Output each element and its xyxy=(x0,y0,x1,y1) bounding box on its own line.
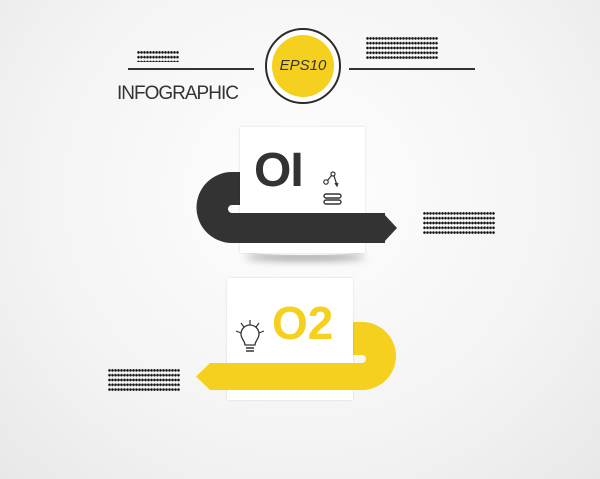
badge: EPS10: EPS10 xyxy=(280,57,326,74)
header xyxy=(117,28,475,104)
dotted text 01 xyxy=(423,211,495,235)
header right dotted text xyxy=(366,36,438,60)
icon: share and lines xyxy=(323,171,342,205)
yellow band loop xyxy=(353,322,396,390)
card 01 xyxy=(240,127,365,253)
dark arrow band xyxy=(240,213,397,243)
badge: EPS10 xyxy=(265,28,341,104)
number 01: OI xyxy=(254,144,303,197)
step 01 xyxy=(196,126,495,266)
yellow arrow band xyxy=(196,363,365,390)
step 02 xyxy=(108,277,396,401)
dotted text 02 xyxy=(108,368,180,392)
dark band top loop xyxy=(196,172,385,243)
number 02: O2 xyxy=(272,297,333,349)
header left dotted text xyxy=(137,50,179,62)
icon: light bulb xyxy=(236,320,264,352)
card 01 shadow xyxy=(245,247,365,255)
card 02 xyxy=(227,278,353,400)
title: INFOGRAPHIC xyxy=(117,83,238,104)
header lines xyxy=(128,68,254,70)
